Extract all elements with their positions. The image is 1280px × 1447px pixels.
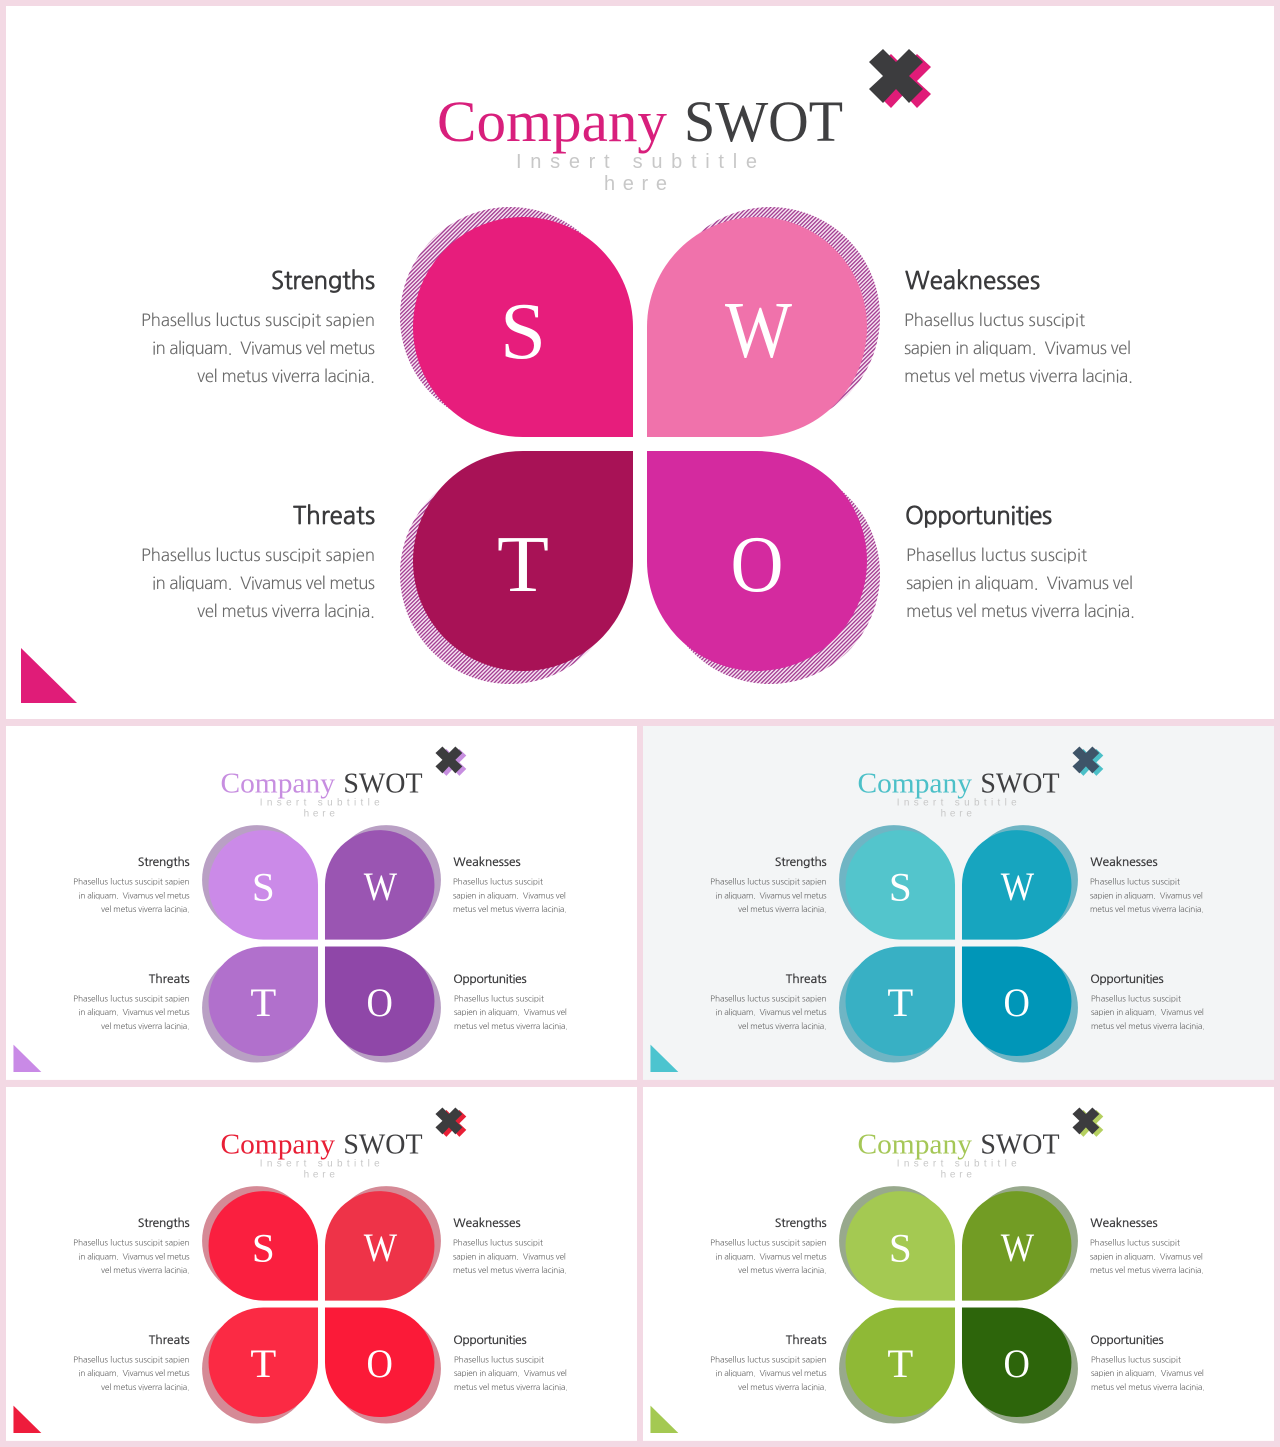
text block: Threats: vel metus viverra lacinia. <box>101 1383 190 1392</box>
text block: Strengths: Strengths <box>775 856 827 868</box>
text block: Weaknesses: Weaknesses <box>1090 856 1158 868</box>
text block: Strengths: Phasellus luctus suscipit sapien <box>710 1238 827 1247</box>
title: Company <box>857 1128 973 1160</box>
panel: purple variant slide <box>6 726 637 1080</box>
title: SWOT <box>343 1128 423 1160</box>
quadrant: W <box>647 207 880 437</box>
quadrant: O: O <box>1004 981 1030 1025</box>
text block: Weaknesses: Phasellus luctus suscipit <box>453 1238 544 1247</box>
quadrant: O <box>647 451 880 684</box>
subtitle: Insert subtitle <box>260 798 380 809</box>
text block: Weaknesses: Weaknesses <box>453 856 521 868</box>
title: Company <box>437 89 667 154</box>
quadrant: S <box>202 1186 318 1301</box>
icon: X mark <box>1072 1107 1103 1137</box>
panel: green variant slide <box>643 1087 1274 1441</box>
text block: Strengths: vel metus viverra lacinia. <box>738 1266 827 1275</box>
text block: Opportunities: sapien in aliquam. Vivamus vel <box>1091 1008 1204 1017</box>
text block: Opportunities <box>453 973 568 1031</box>
text block: Weaknesses: sapien in aliquam. Vivamus vel <box>904 340 1131 357</box>
text block: Opportunities: Phasellus luctus suscipit <box>1091 994 1182 1003</box>
quadrant: W: W <box>1001 865 1035 909</box>
text block: Weaknesses: metus vel metus viverra lacinia. <box>1090 1266 1204 1275</box>
subtitle: Insert subtitle <box>897 798 1017 809</box>
subtitle <box>897 798 1017 820</box>
text block: Strengths <box>73 1217 190 1275</box>
text block: Opportunities: metus vel metus viverra lacinia. <box>906 603 1135 620</box>
text block: Weaknesses <box>453 856 567 914</box>
text block: Opportunities: metus vel metus viverra lacinia. <box>454 1383 568 1392</box>
subtitle: Insert subtitle <box>516 151 757 173</box>
icon: X mark <box>1072 746 1103 776</box>
text block: Strengths: Strengths <box>138 1217 190 1229</box>
text block: Weaknesses <box>1090 856 1204 914</box>
text block: Weaknesses: Phasellus luctus suscipit <box>904 312 1086 329</box>
text block: Opportunities: Phasellus luctus suscipit <box>454 994 545 1003</box>
text block: Opportunities: Phasellus luctus suscipit <box>906 547 1088 564</box>
text block: Threats: Threats <box>149 1334 190 1346</box>
text block: Weaknesses: sapien in aliquam. Vivamus vel <box>453 1252 566 1261</box>
subtitle: here <box>941 1170 972 1181</box>
text block: Opportunities <box>1090 1334 1205 1392</box>
text block: Strengths: Strengths <box>775 1217 827 1229</box>
icon: X mark <box>435 746 466 776</box>
quadrant: O: O <box>730 521 784 609</box>
text block: Weaknesses: Weaknesses <box>905 269 1040 293</box>
text block: Weaknesses: metus vel metus viverra lacinia. <box>904 368 1133 385</box>
text block: Weaknesses: metus vel metus viverra lacinia. <box>453 1266 567 1275</box>
text block: Threats: Threats <box>786 1334 827 1346</box>
text block: Opportunities: metus vel metus viverra lacinia. <box>1091 1022 1205 1031</box>
text block: Strengths: vel metus viverra lacinia. <box>738 905 827 914</box>
quadrant: T <box>202 1308 318 1423</box>
text block: Threats: vel metus viverra lacinia. <box>738 1383 827 1392</box>
text block: Strengths: Phasellus luctus suscipit sapien <box>73 1238 190 1247</box>
text block: Strengths: Strengths <box>138 856 190 868</box>
text block: Weaknesses: Weaknesses <box>453 1217 521 1229</box>
quadrant: T <box>839 1308 955 1423</box>
icon: X mark <box>869 49 931 108</box>
quadrant: S <box>400 207 633 437</box>
text block: Opportunities: Opportunities <box>1090 1334 1164 1346</box>
corner triangle <box>13 1045 41 1072</box>
text block: Opportunities: Opportunities <box>453 973 527 985</box>
text block: Threats <box>710 1334 827 1392</box>
text block: Threats: Phasellus luctus suscipit sapien <box>710 1355 827 1364</box>
icon: X mark <box>435 1107 466 1137</box>
text block: Opportunities: metus vel metus viverra lacinia. <box>1091 1383 1205 1392</box>
corner triangle <box>650 1045 678 1072</box>
text block: Threats: vel metus viverra lacinia. <box>101 1022 190 1031</box>
text block: Strengths: vel metus viverra lacinia. <box>101 905 190 914</box>
quadrant: W <box>325 1186 441 1301</box>
quadrant: O: O <box>367 1342 393 1386</box>
quadrant: S: S <box>889 865 912 909</box>
quadrant: O: O <box>1004 1342 1030 1386</box>
text block: Opportunities: Opportunities <box>453 1334 527 1346</box>
title: SWOT <box>343 767 423 799</box>
quadrant: O: O <box>367 981 393 1025</box>
text block: Threats: in aliquam. Vivamus vel metus <box>152 575 375 592</box>
text block: Opportunities: Opportunities <box>1090 973 1164 985</box>
text block: Strengths: in aliquam. Vivamus vel metus <box>79 891 190 900</box>
subtitle: Insert subtitle <box>260 1159 380 1170</box>
text block: Weaknesses <box>453 1217 567 1275</box>
subtitle: here <box>941 809 972 820</box>
title: SWOT <box>980 1128 1060 1160</box>
text block: Threats: Threats <box>293 504 375 528</box>
text block: Threats: in aliquam. Vivamus vel metus <box>716 1369 827 1378</box>
text block: Strengths: Phasellus luctus suscipit sapien <box>73 877 190 886</box>
text block: Strengths <box>710 1217 827 1275</box>
text block: Threats: in aliquam. Vivamus vel metus <box>716 1008 827 1017</box>
panel: red variant slide <box>6 1087 637 1441</box>
text block: Strengths: in aliquam. Vivamus vel metus <box>716 1252 827 1261</box>
quadrant: W: W <box>364 865 398 909</box>
text block: Strengths: Strengths <box>271 269 375 293</box>
quadrant: S: S <box>500 288 546 376</box>
subtitle <box>260 1159 380 1181</box>
text block: Strengths: Phasellus luctus suscipit sapien <box>710 877 827 886</box>
quadrant: S <box>202 825 318 940</box>
title: SWOT <box>684 89 843 154</box>
text block: Opportunities: sapien in aliquam. Vivamus vel <box>454 1008 567 1017</box>
quadrant: O <box>325 947 441 1062</box>
quadrant: S: S <box>252 865 275 909</box>
text block: Strengths <box>710 856 827 914</box>
text block: Strengths <box>141 269 375 385</box>
text block: Threats: Threats <box>786 973 827 985</box>
text block: Strengths: in aliquam. Vivamus vel metus <box>716 891 827 900</box>
text block: Weaknesses: sapien in aliquam. Vivamus vel <box>1090 891 1203 900</box>
corner triangle <box>13 1406 41 1433</box>
quadrant: O <box>962 947 1078 1062</box>
subtitle <box>260 798 380 820</box>
text block: Weaknesses <box>1090 1217 1204 1275</box>
text block: Weaknesses: metus vel metus viverra lacinia. <box>1090 905 1204 914</box>
quadrant: T <box>839 947 955 1062</box>
quadrant: T: T <box>497 521 549 609</box>
text block: Weaknesses: sapien in aliquam. Vivamus vel <box>453 891 566 900</box>
quadrant: W: W <box>1001 1226 1035 1270</box>
text block: Strengths: in aliquam. Vivamus vel metus <box>79 1252 190 1261</box>
title: Company <box>220 1128 336 1160</box>
quadrant: S: S <box>252 1226 275 1270</box>
text block: Opportunities <box>453 1334 568 1392</box>
text block: Threats: Phasellus luctus suscipit sapien <box>73 1355 190 1364</box>
text block: Opportunities: Opportunities <box>905 504 1052 528</box>
text block: Strengths: in aliquam. Vivamus vel metus <box>152 340 375 357</box>
text block: Strengths: Phasellus luctus suscipit sapien <box>141 312 375 329</box>
quadrant: T: T <box>250 981 276 1025</box>
text block: Threats <box>73 1334 190 1392</box>
text block: Threats: vel metus viverra lacinia. <box>738 1022 827 1031</box>
subtitle: Insert subtitle <box>897 1159 1017 1170</box>
text block: Threats <box>73 973 190 1031</box>
corner triangle <box>21 648 77 703</box>
text block: Threats: Threats <box>149 973 190 985</box>
text block: Opportunities: sapien in aliquam. Vivamus vel <box>906 575 1133 592</box>
subtitle <box>897 1159 1017 1181</box>
quadrant: T: T <box>887 1342 913 1386</box>
text block: Threats: in aliquam. Vivamus vel metus <box>79 1369 190 1378</box>
text block: Weaknesses <box>904 269 1133 385</box>
text block: Threats: Phasellus luctus suscipit sapien <box>73 994 190 1003</box>
quadrant: O <box>325 1308 441 1423</box>
quadrant: T: T <box>887 981 913 1025</box>
quadrant: W: W <box>725 287 792 375</box>
title: Company <box>220 767 336 799</box>
quadrant: T: T <box>250 1342 276 1386</box>
text block: Weaknesses: Phasellus luctus suscipit <box>453 877 544 886</box>
text block: Threats <box>710 973 827 1031</box>
subtitle: here <box>604 173 667 195</box>
text block: Opportunities: sapien in aliquam. Vivamus vel <box>454 1369 567 1378</box>
text block: Opportunities: Phasellus luctus suscipit <box>454 1355 545 1364</box>
text block: Weaknesses: metus vel metus viverra lacinia. <box>453 905 567 914</box>
subtitle <box>516 151 757 195</box>
text block: Opportunities: metus vel metus viverra lacinia. <box>454 1022 568 1031</box>
text block: Strengths: vel metus viverra lacinia. <box>101 1266 190 1275</box>
quadrant: T <box>202 947 318 1062</box>
text block: Strengths: vel metus viverra lacinia. <box>197 368 375 385</box>
subtitle: here <box>304 809 335 820</box>
text block: Opportunities <box>905 504 1135 620</box>
text block: Opportunities <box>1090 973 1205 1031</box>
text block: Weaknesses: Phasellus luctus suscipit <box>1090 1238 1181 1247</box>
text block: Threats: Phasellus luctus suscipit sapien <box>141 547 375 564</box>
quadrant: O <box>962 1308 1078 1423</box>
text block: Threats: vel metus viverra lacinia. <box>197 603 375 620</box>
quadrant: S <box>839 1186 955 1301</box>
quadrant: W <box>962 1186 1078 1301</box>
panel: teal variant slide <box>643 726 1274 1080</box>
text block: Threats: in aliquam. Vivamus vel metus <box>79 1008 190 1017</box>
text block: Threats: Phasellus luctus suscipit sapien <box>710 994 827 1003</box>
quadrant: W <box>325 825 441 940</box>
text block: Threats <box>141 504 375 620</box>
text block: Weaknesses: Phasellus luctus suscipit <box>1090 877 1181 886</box>
panel: main SWOT slide (pink) <box>6 6 1274 719</box>
quadrant: S: S <box>889 1226 912 1270</box>
quadrant: S <box>839 825 955 940</box>
subtitle: here <box>304 1170 335 1181</box>
text block: Opportunities: sapien in aliquam. Vivamus vel <box>1091 1369 1204 1378</box>
text block: Opportunities: Phasellus luctus suscipit <box>1091 1355 1182 1364</box>
text block: Strengths <box>73 856 190 914</box>
quadrant: W <box>962 825 1078 940</box>
text block: Weaknesses: sapien in aliquam. Vivamus vel <box>1090 1252 1203 1261</box>
text block: Weaknesses: Weaknesses <box>1090 1217 1158 1229</box>
quadrant: W: W <box>364 1226 398 1270</box>
corner triangle <box>650 1406 678 1433</box>
title: SWOT <box>980 767 1060 799</box>
title: Company <box>857 767 973 799</box>
quadrant: T <box>400 451 633 684</box>
